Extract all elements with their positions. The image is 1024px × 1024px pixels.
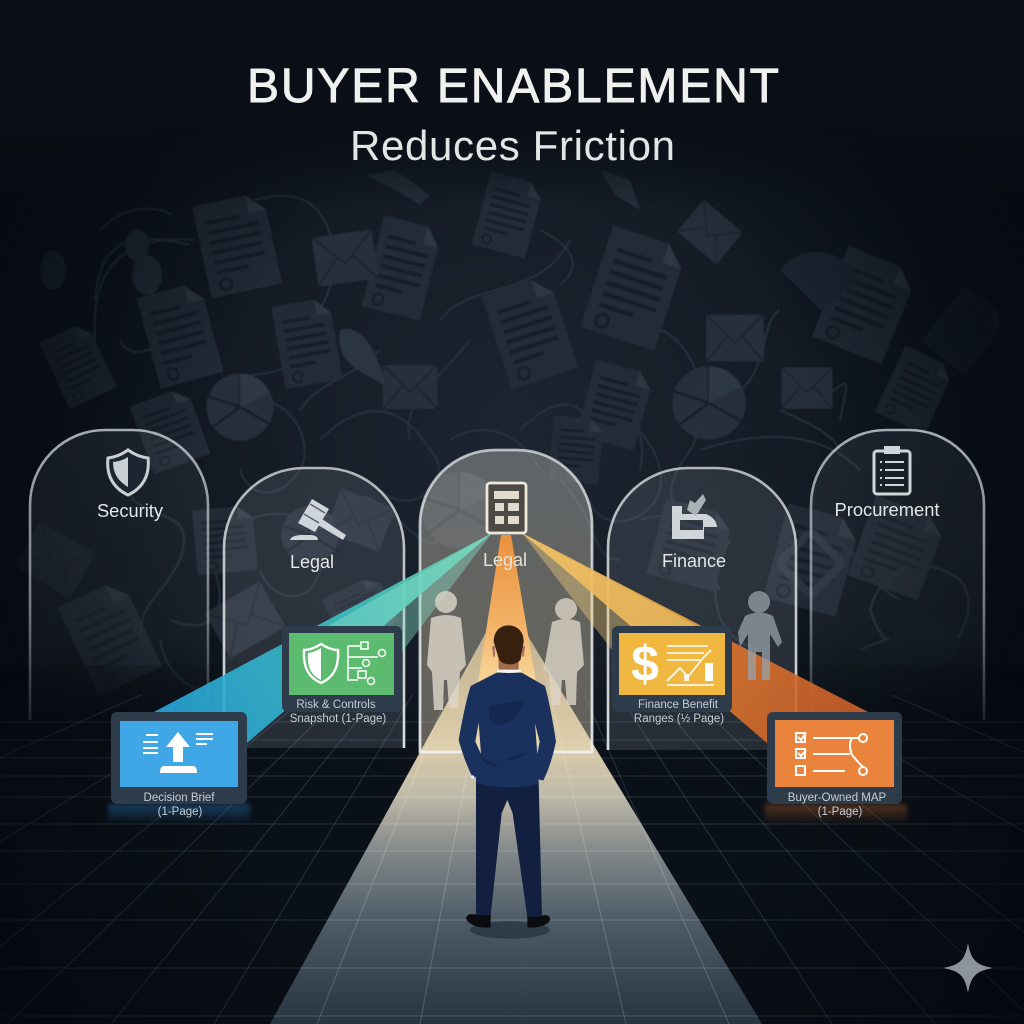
person viewed from behind xyxy=(459,625,556,939)
label: Finance: Finance xyxy=(662,551,726,571)
arm gap left xyxy=(475,723,481,754)
icon: shield and tree xyxy=(304,642,386,684)
card: Decision Brief xyxy=(108,712,250,824)
card: Buyer-Owned MAP xyxy=(765,712,907,824)
card: Finance Benefit xyxy=(612,626,732,712)
silhouette: right colleague xyxy=(544,598,584,705)
floor with perspective grid xyxy=(0,665,1024,1024)
icon: shield xyxy=(108,450,148,495)
silhouette: far colleague xyxy=(738,591,782,680)
gate: centre Legal xyxy=(420,450,592,752)
label: Finance Benefit: Finance Benefit xyxy=(638,699,719,711)
label: Decision Brief: Decision Brief xyxy=(144,792,215,804)
icon: finance hand with tick xyxy=(672,494,717,539)
outline of centre gate xyxy=(420,450,592,752)
label: Decision Brief page count: (1-Page) xyxy=(158,806,203,818)
gate: Legal xyxy=(224,468,404,748)
gate: Procurement xyxy=(811,430,984,720)
ears xyxy=(492,646,525,657)
icon: dollar and chart: $ xyxy=(631,636,659,692)
shirt cuff xyxy=(471,775,474,779)
collar xyxy=(497,670,521,673)
trousers xyxy=(476,782,542,917)
jacket shadows xyxy=(480,699,527,767)
shoes xyxy=(466,914,550,928)
label: Snapshot page count: Snapshot (1-Page) xyxy=(290,713,386,725)
icon: sparkle mark xyxy=(943,943,993,993)
label: Legal centre: Legal xyxy=(483,550,527,570)
label: Ranges page count: Ranges (½ Page) xyxy=(634,713,724,725)
arm gap right xyxy=(535,723,540,754)
beam to Risk and Controls xyxy=(328,533,492,652)
top fade behind title xyxy=(0,0,1024,205)
card: Risk and Controls xyxy=(282,626,402,712)
beam to Buyer-Owned MAP xyxy=(522,533,870,743)
subtitle: Reduces Friction xyxy=(350,122,675,169)
label: Procurement: Procurement xyxy=(834,500,940,520)
shoe shadows xyxy=(470,921,550,939)
label: Legal left: Legal xyxy=(290,552,334,572)
main light beam on the floor xyxy=(270,598,762,1024)
label: Risk and Controls: Risk & Controls xyxy=(296,699,376,711)
floor grid lines seen over the beam xyxy=(274,658,758,1024)
beam to Decision Brief xyxy=(152,533,492,743)
icon: upload arrow xyxy=(143,732,213,773)
label: Security: Security xyxy=(97,501,163,521)
icon: calculator xyxy=(487,483,526,533)
jacket xyxy=(459,673,556,788)
gate: Finance xyxy=(608,468,796,750)
hair xyxy=(494,625,524,664)
silhouette: left colleague xyxy=(427,591,466,710)
gate: Security xyxy=(30,430,208,720)
icon: clipboard xyxy=(874,446,910,494)
floor vignette xyxy=(0,665,1024,1024)
label: Buyer-Owned MAP: Buyer-Owned MAP xyxy=(788,792,887,804)
clutter of documents and tangled connections xyxy=(14,170,1009,704)
title: BUYER ENABLEMENT xyxy=(247,60,779,113)
centre orange beam xyxy=(478,535,536,682)
beam to Finance Benefit xyxy=(522,533,697,650)
neck xyxy=(499,657,519,672)
icon: gavel xyxy=(290,499,346,540)
icon: checklist and path xyxy=(796,733,867,775)
label: Buyer MAP page count: (1-Page) xyxy=(818,806,863,818)
